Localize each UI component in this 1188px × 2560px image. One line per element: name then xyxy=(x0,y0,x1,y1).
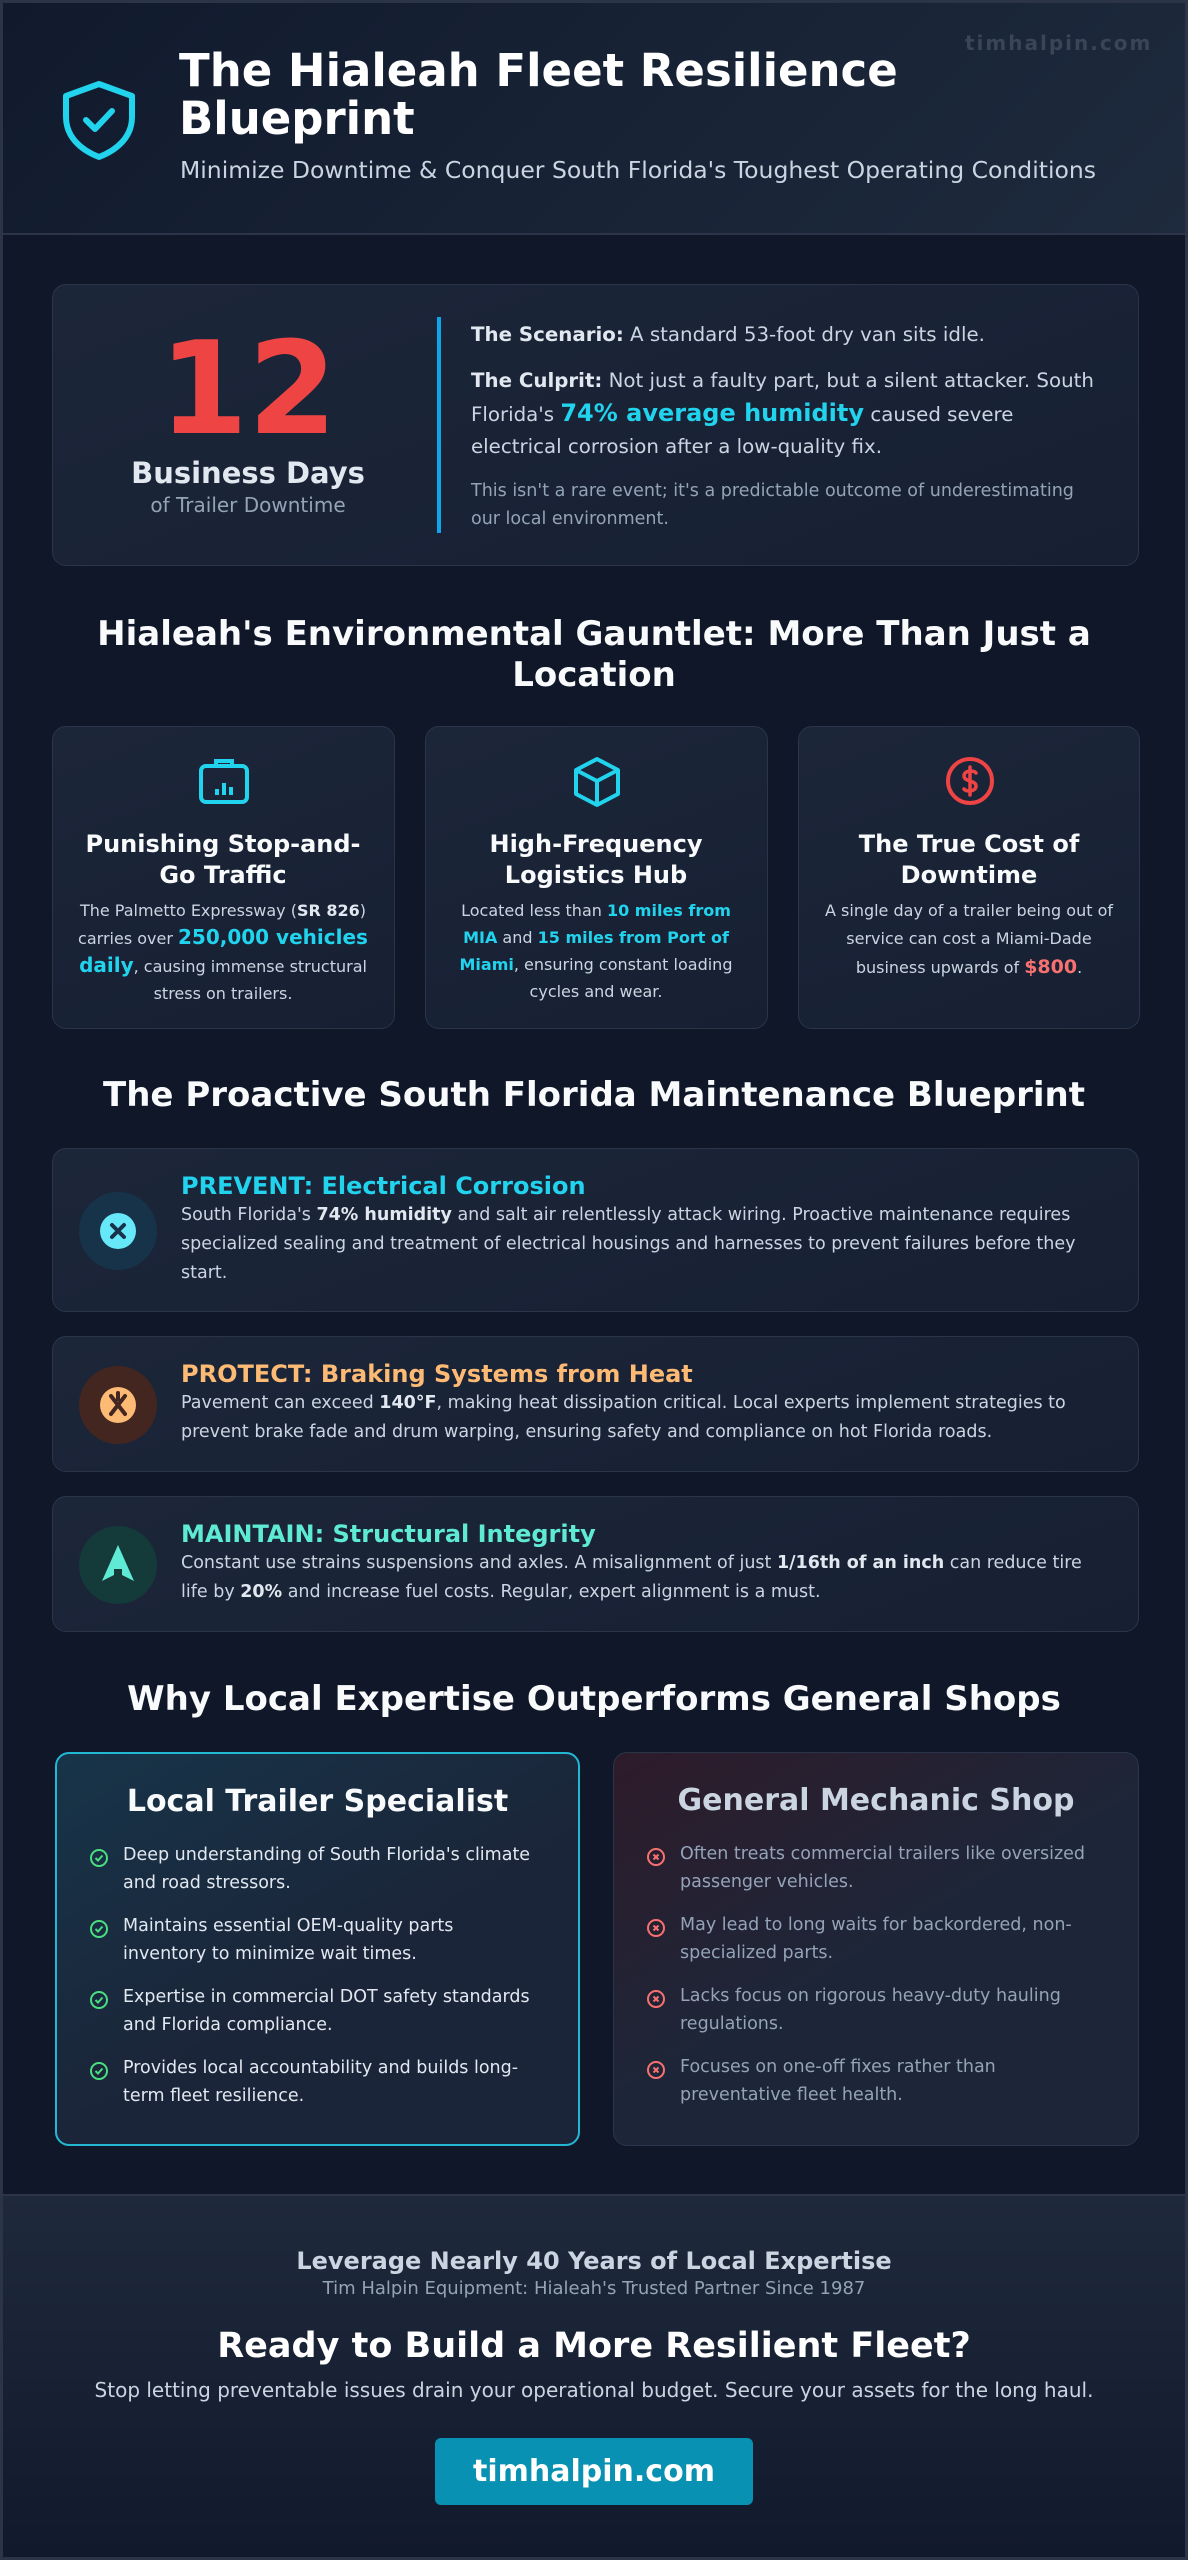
list: cons: Often treats commercial trailers like oversized passenger vehicles. xyxy=(680,1844,1085,1892)
panel: maintain: Constant use strains suspensions and axles. A misalignment of just 1/16th of an inch can reduce tire life by 20% and increase fuel costs. Regular, expert alignment is a must. xyxy=(181,1553,1082,1602)
panel: protect: Pavement can exceed 140°F, making heat dissipation critical. Local experts implement strategies to prevent brake fade and drum warping, ensuring safety and compliance on hot Florida roads. xyxy=(181,1393,1066,1442)
panel: logistics hub: Located less than 10 miles from MIA and 15 miles from Port of Miami, ensuring constant loading cycles and wear. xyxy=(460,901,732,1001)
panel: prevent xyxy=(52,1148,1139,1312)
heading: environmental gauntlet: Hialeah's Environmental Gauntlet: More Than Just a Location xyxy=(97,614,1091,695)
panel: maintain: MAINTAIN: Structural Integrity xyxy=(181,1520,596,1548)
list: pros xyxy=(90,1845,530,2106)
scenario text: The Culprit: Not just a faulty part, but a silent attacker. South Florida's 74% average humidity caused severe electrical corrosion after a low-quality fix. xyxy=(471,369,1094,458)
footer xyxy=(3,2194,1185,2557)
button xyxy=(435,2438,753,2505)
list: cons: May lead to long waits for backordered, non-specialized parts. xyxy=(680,1915,1072,1963)
icon: cube xyxy=(574,757,620,807)
panel: true cost xyxy=(798,726,1140,1029)
big stat 12 xyxy=(131,315,365,517)
list: cons: Focuses on one-off fixes rather than preventative fleet health. xyxy=(680,2057,996,2105)
panel: true cost: The True Cost of Downtime xyxy=(859,830,1079,889)
panel: stop-and-go traffic xyxy=(52,726,395,1029)
panel: prevent: South Florida's 74% humidity and salt air relentlessly attack wiring. Proactive maintenance requires specialized sealing and treatment of electrical housings and harnesses to prevent failures before they start. xyxy=(181,1205,1075,1283)
panel: logistics hub xyxy=(425,726,768,1029)
title: The Hialeah Fleet Resilience Blueprint xyxy=(179,44,898,145)
button: timhalpin.com xyxy=(473,2454,715,2489)
icon: prevent xyxy=(79,1192,157,1270)
list: pros: Maintains essential OEM-quality parts inventory to minimize wait times. xyxy=(123,1916,453,1964)
panel: maintain xyxy=(52,1496,1139,1632)
header xyxy=(3,3,1185,235)
scenario text: This isn't a rare event; it's a predictable outcome of underestimating our local environment. xyxy=(471,481,1074,529)
subtitle: Minimize Downtime & Conquer South Florida's Toughest Operating Conditions xyxy=(180,156,1096,184)
panel: stop-and-go traffic: Punishing Stop-and-Go Traffic xyxy=(85,830,360,889)
icon: protect xyxy=(79,1366,157,1444)
footer: Ready to Build a More Resilient Fleet? xyxy=(217,2326,971,2366)
scenario text: The Scenario: A standard 53-foot dry van sits idle. xyxy=(471,323,985,346)
list: cons: Lacks focus on rigorous heavy-duty hauling regulations. xyxy=(680,1986,1061,2034)
footer: Stop letting preventable issues drain your operational budget. Secure your assets for the long haul. xyxy=(95,2378,1093,2402)
icon: shield xyxy=(63,81,135,160)
panel: protect xyxy=(52,1336,1139,1472)
panel: prevent: PREVENT: Electrical Corrosion xyxy=(181,1172,586,1200)
footer: Tim Halpin Equipment: Hialeah's Trusted Partner Since 1987 xyxy=(323,2278,865,2299)
panel: stop-and-go traffic: The Palmetto Expressway (SR 826) carries over 250,000 vehicles daily, causing immense structural stress on trailers. xyxy=(78,901,368,1003)
icon: maintain xyxy=(79,1526,157,1604)
heading: local expertise: Why Local Expertise Outperforms General Shops xyxy=(127,1679,1061,1719)
list: pros: Provides local accountability and builds long-term fleet resilience. xyxy=(123,2058,518,2106)
panel: local specialist: Local Trailer Specialist xyxy=(127,1784,508,1819)
big stat 12: 12 xyxy=(159,315,337,464)
big stat 12: of Trailer Downtime xyxy=(150,493,346,517)
list: pros: Deep understanding of South Florida's climate and road stressors. xyxy=(123,1845,530,1893)
panel: local specialist xyxy=(55,1752,580,2146)
icon: briefcase chart xyxy=(199,759,249,804)
list: pros: Expertise in commercial DOT safety standards and Florida compliance. xyxy=(123,1987,530,2035)
panel: protect: PROTECT: Braking Systems from Heat xyxy=(181,1360,693,1388)
footer: Leverage Nearly 40 Years of Local Expertise xyxy=(296,2247,892,2275)
panel: logistics hub: High-Frequency Logistics Hub xyxy=(489,830,702,889)
scenario text xyxy=(470,323,1094,529)
panel: general shop: General Mechanic Shop xyxy=(678,1783,1074,1818)
list: cons xyxy=(647,1844,1085,2105)
watermark: timhalpin.com xyxy=(965,31,1152,55)
panel: scenario xyxy=(52,284,1139,566)
icon: dollar xyxy=(946,757,994,805)
heading: maintenance blueprint: The Proactive South Florida Maintenance Blueprint xyxy=(103,1075,1085,1115)
panel: general shop xyxy=(613,1752,1139,2146)
panel: true cost: A single day of a trailer being out of service can cost a Miami-Dade business upwards of $800. xyxy=(825,901,1113,978)
big stat 12: Business Days xyxy=(131,456,365,490)
